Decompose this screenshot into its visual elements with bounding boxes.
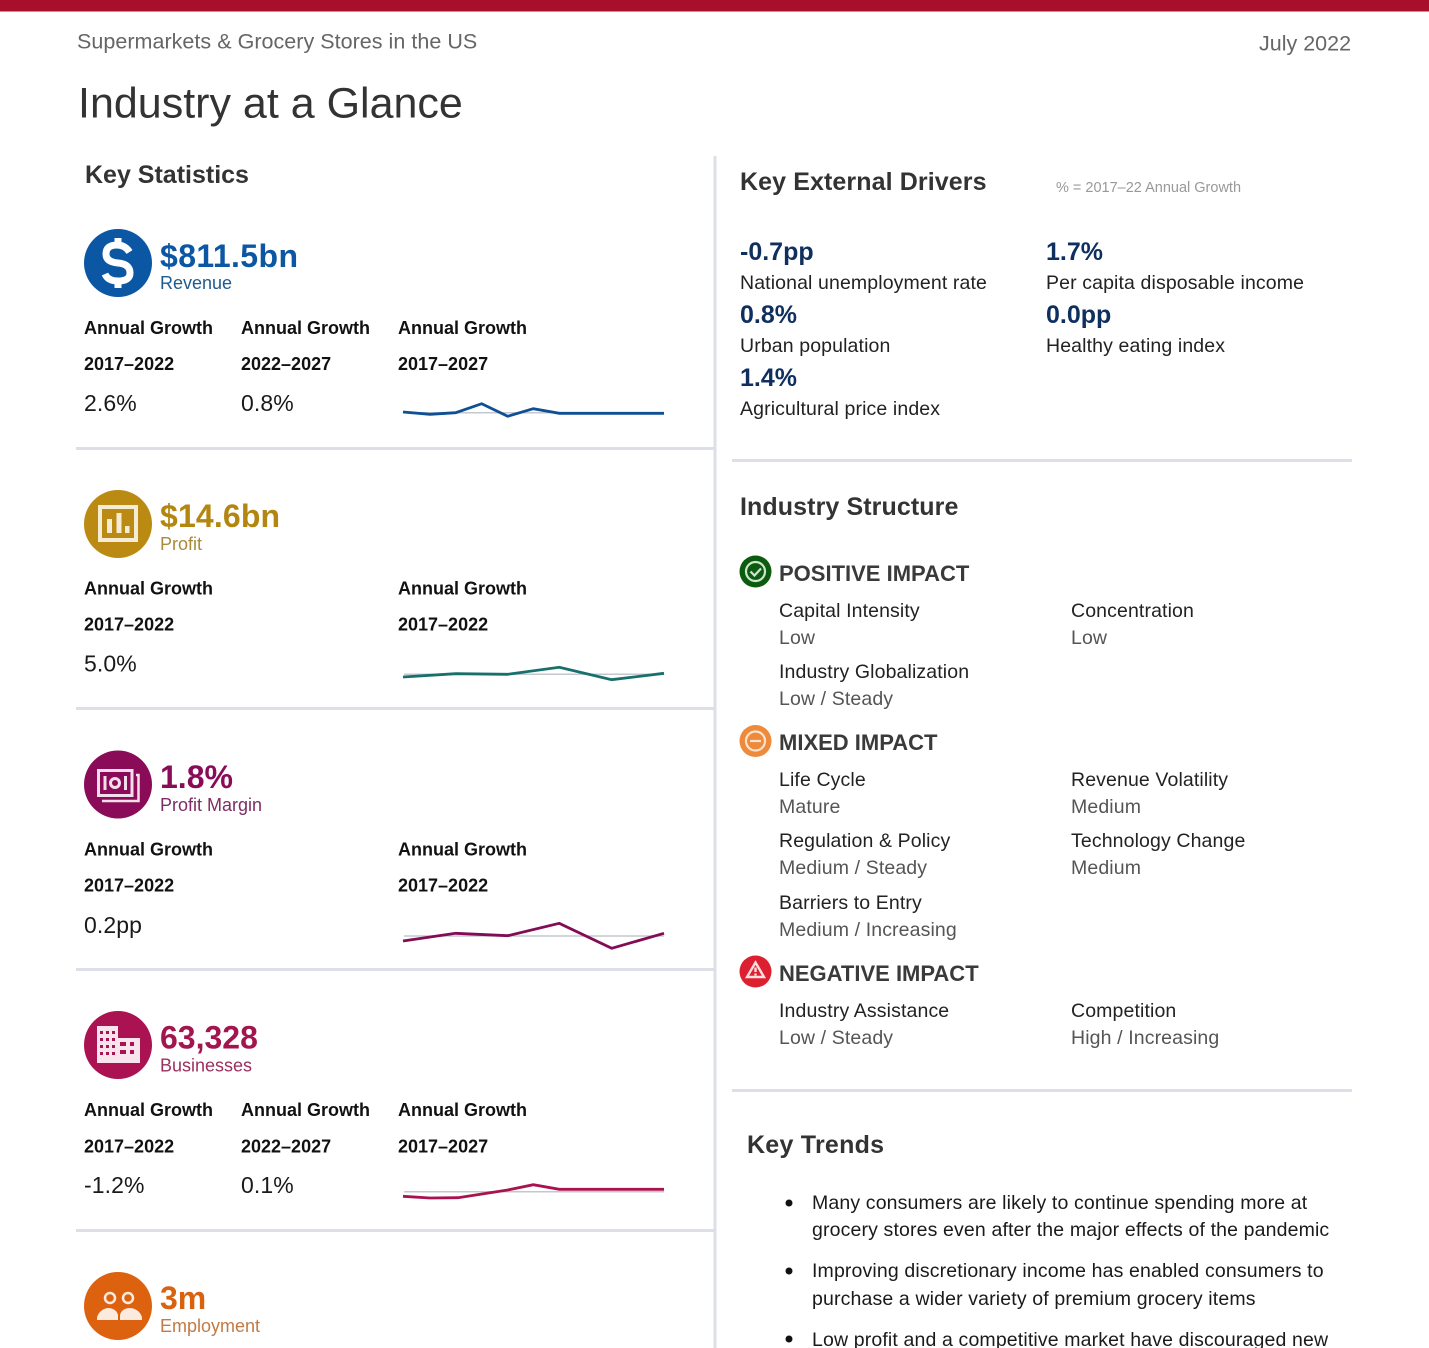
- panel: key external drivers: [740, 168, 1304, 420]
- sparkline: revenue: [403, 404, 664, 416]
- trend 1: Many consumers are likely to continue spending more at: [812, 1192, 1308, 1214]
- top red bar: [0, 0, 1429, 12]
- trend 1: grocery stores even after the major effects of the pandemic: [812, 1219, 1329, 1241]
- driver: agricultural price index: [740, 364, 940, 420]
- negative impact heading: NEGATIVE IMPACT: [779, 961, 979, 986]
- mixed impact group: Medium / Increasing: [779, 919, 957, 941]
- growth columns: 0.2pp: [84, 912, 142, 938]
- growth columns: 2022–2027: [241, 1136, 331, 1156]
- growth columns: 2017–2022: [84, 614, 174, 634]
- heading: key trends: Key Trends: [747, 1131, 884, 1159]
- growth columns: Annual Growth: [84, 840, 213, 860]
- icon: banknotes: [84, 750, 152, 818]
- revenue label: Revenue: [160, 273, 232, 293]
- growth columns: 2017–2027: [398, 354, 488, 374]
- positive impact group: Industry Globalization: [779, 661, 969, 683]
- icon: people: [84, 1272, 152, 1340]
- driver: national unemployment rate: [740, 238, 987, 294]
- heading: industry structure: Industry Structure: [740, 493, 958, 521]
- negative impact group: Industry Assistance: [779, 1000, 949, 1022]
- stat: employment: [84, 1272, 260, 1340]
- icon: bar chart: [84, 490, 152, 558]
- sparkline: profit margin: [403, 923, 664, 948]
- trend 2: [786, 1260, 1324, 1310]
- driver: healthy eating index: [1046, 301, 1225, 357]
- driver: urban population: 0.8%: [740, 301, 797, 329]
- growth columns: Annual Growth: [398, 1100, 527, 1120]
- positive impact group: Low / Steady: [779, 688, 893, 710]
- trend 2: Improving discretionary income has enabled consumers to: [812, 1260, 1324, 1282]
- growth columns: Annual Growth: [241, 1100, 370, 1120]
- mixed impact group: Regulation & Policy: [779, 830, 951, 852]
- growth columns: Annual Growth: [84, 318, 213, 338]
- driver: healthy eating index: 0.0pp: [1046, 301, 1111, 329]
- growth columns: [84, 840, 527, 938]
- growth columns: 2017–2022: [398, 614, 488, 634]
- panel: industry structure: [740, 493, 1245, 1049]
- mixed impact group: Barriers to Entry: [779, 892, 922, 914]
- driver: national unemployment rate: National unemployment rate: [740, 272, 987, 294]
- negative impact group: Low / Steady: [779, 1027, 893, 1049]
- driver: urban population: [740, 301, 890, 357]
- growth columns: 2017–2022: [398, 876, 488, 896]
- icon: warning: [740, 956, 772, 988]
- growth columns: 2017–2027: [398, 1136, 488, 1156]
- revenue value: $811.5bn: [160, 238, 298, 274]
- icon: minus: [740, 725, 772, 757]
- sparkline: businesses: [403, 1185, 664, 1198]
- employment label: Employment: [160, 1316, 260, 1336]
- profit margin value: 1.8%: [160, 759, 233, 795]
- growth columns: Annual Growth: [398, 578, 527, 598]
- mixed impact group: Medium / Steady: [779, 857, 927, 879]
- drivers note: % = 2017–22 Annual Growth: [1056, 180, 1241, 196]
- icon: dollar: [84, 229, 152, 297]
- growth columns: Annual Growth: [84, 578, 213, 598]
- positive impact group: [740, 556, 1194, 710]
- profit value: $14.6bn: [160, 498, 280, 534]
- panel: key trends: [747, 1131, 1329, 1348]
- businesses value: 63,328: [160, 1020, 258, 1056]
- driver: national unemployment rate: -0.7pp: [740, 238, 814, 266]
- mixed impact group: [740, 725, 1245, 941]
- growth columns: 5.0%: [84, 650, 137, 676]
- positive impact group: Low: [1071, 627, 1108, 649]
- positive impact group: Concentration: [1071, 600, 1194, 622]
- mixed impact group: Revenue Volatility: [1071, 769, 1228, 791]
- heading: key external drivers: Key External Drivers: [740, 168, 987, 196]
- icon: check: [740, 556, 772, 588]
- report date: July 2022: [1259, 32, 1351, 56]
- growth columns: [84, 318, 527, 416]
- driver: healthy eating index: Healthy eating index: [1046, 335, 1225, 357]
- panel: key statistics: [84, 161, 664, 1340]
- trend 2: purchase a wider variety of premium grocery items: [812, 1288, 1256, 1310]
- negative impact group: Competition: [1071, 1000, 1176, 1022]
- report subtitle: Supermarkets & Grocery Stores in the US: [77, 30, 477, 54]
- growth columns: Annual Growth: [398, 840, 527, 860]
- growth columns: 2017–2022: [84, 1136, 174, 1156]
- driver: urban population: Urban population: [740, 335, 890, 357]
- mixed impact group: Life Cycle: [779, 769, 866, 791]
- negative impact group: [740, 956, 1219, 1049]
- growth columns: 2017–2022: [84, 354, 174, 374]
- mixed impact group: Medium: [1071, 857, 1141, 879]
- driver: per capita disposable income: [1046, 238, 1304, 294]
- trend 1: [786, 1192, 1329, 1241]
- positive impact group: Capital Intensity: [779, 600, 920, 622]
- icon: building: [84, 1011, 152, 1079]
- employment value: 3m: [160, 1280, 206, 1316]
- mixed impact group: Mature: [779, 796, 840, 818]
- driver: agricultural price index: Agricultural price index: [740, 398, 940, 420]
- positive impact heading: POSITIVE IMPACT: [779, 561, 970, 586]
- driver: agricultural price index: 1.4%: [740, 364, 797, 392]
- growth columns: Annual Growth: [398, 318, 527, 338]
- growth columns: Annual Growth: [241, 318, 370, 338]
- growth columns: -1.2%: [84, 1172, 145, 1198]
- growth columns: 2017–2022: [84, 876, 174, 896]
- title: Industry at a Glance: [78, 80, 463, 128]
- negative impact group: High / Increasing: [1071, 1027, 1219, 1049]
- mixed impact heading: MIXED IMPACT: [779, 730, 938, 755]
- sparkline: profit: [403, 667, 664, 680]
- growth columns: [84, 1100, 527, 1198]
- growth columns: 2.6%: [84, 390, 137, 416]
- mixed impact group: Technology Change: [1071, 830, 1245, 852]
- mixed impact group: Medium: [1071, 796, 1141, 818]
- stat: profit margin: [84, 750, 664, 948]
- growth columns: 2022–2027: [241, 354, 331, 374]
- growth columns: Annual Growth: [84, 1100, 213, 1120]
- growth columns: 0.1%: [241, 1172, 294, 1198]
- businesses label: Businesses: [160, 1056, 252, 1076]
- driver: per capita disposable income: Per capita disposable income: [1046, 272, 1304, 294]
- driver: per capita disposable income: 1.7%: [1046, 238, 1103, 266]
- positive impact group: Low: [779, 627, 816, 649]
- growth columns: [84, 578, 527, 676]
- stat: businesses: [84, 1011, 664, 1198]
- growth columns: 0.8%: [241, 390, 294, 416]
- profit label: Profit: [160, 534, 202, 554]
- profit margin label: Profit Margin: [160, 795, 262, 815]
- stat: profit: [84, 490, 664, 680]
- heading: key statistics: Key Statistics: [85, 161, 249, 189]
- stat: revenue: [84, 229, 664, 416]
